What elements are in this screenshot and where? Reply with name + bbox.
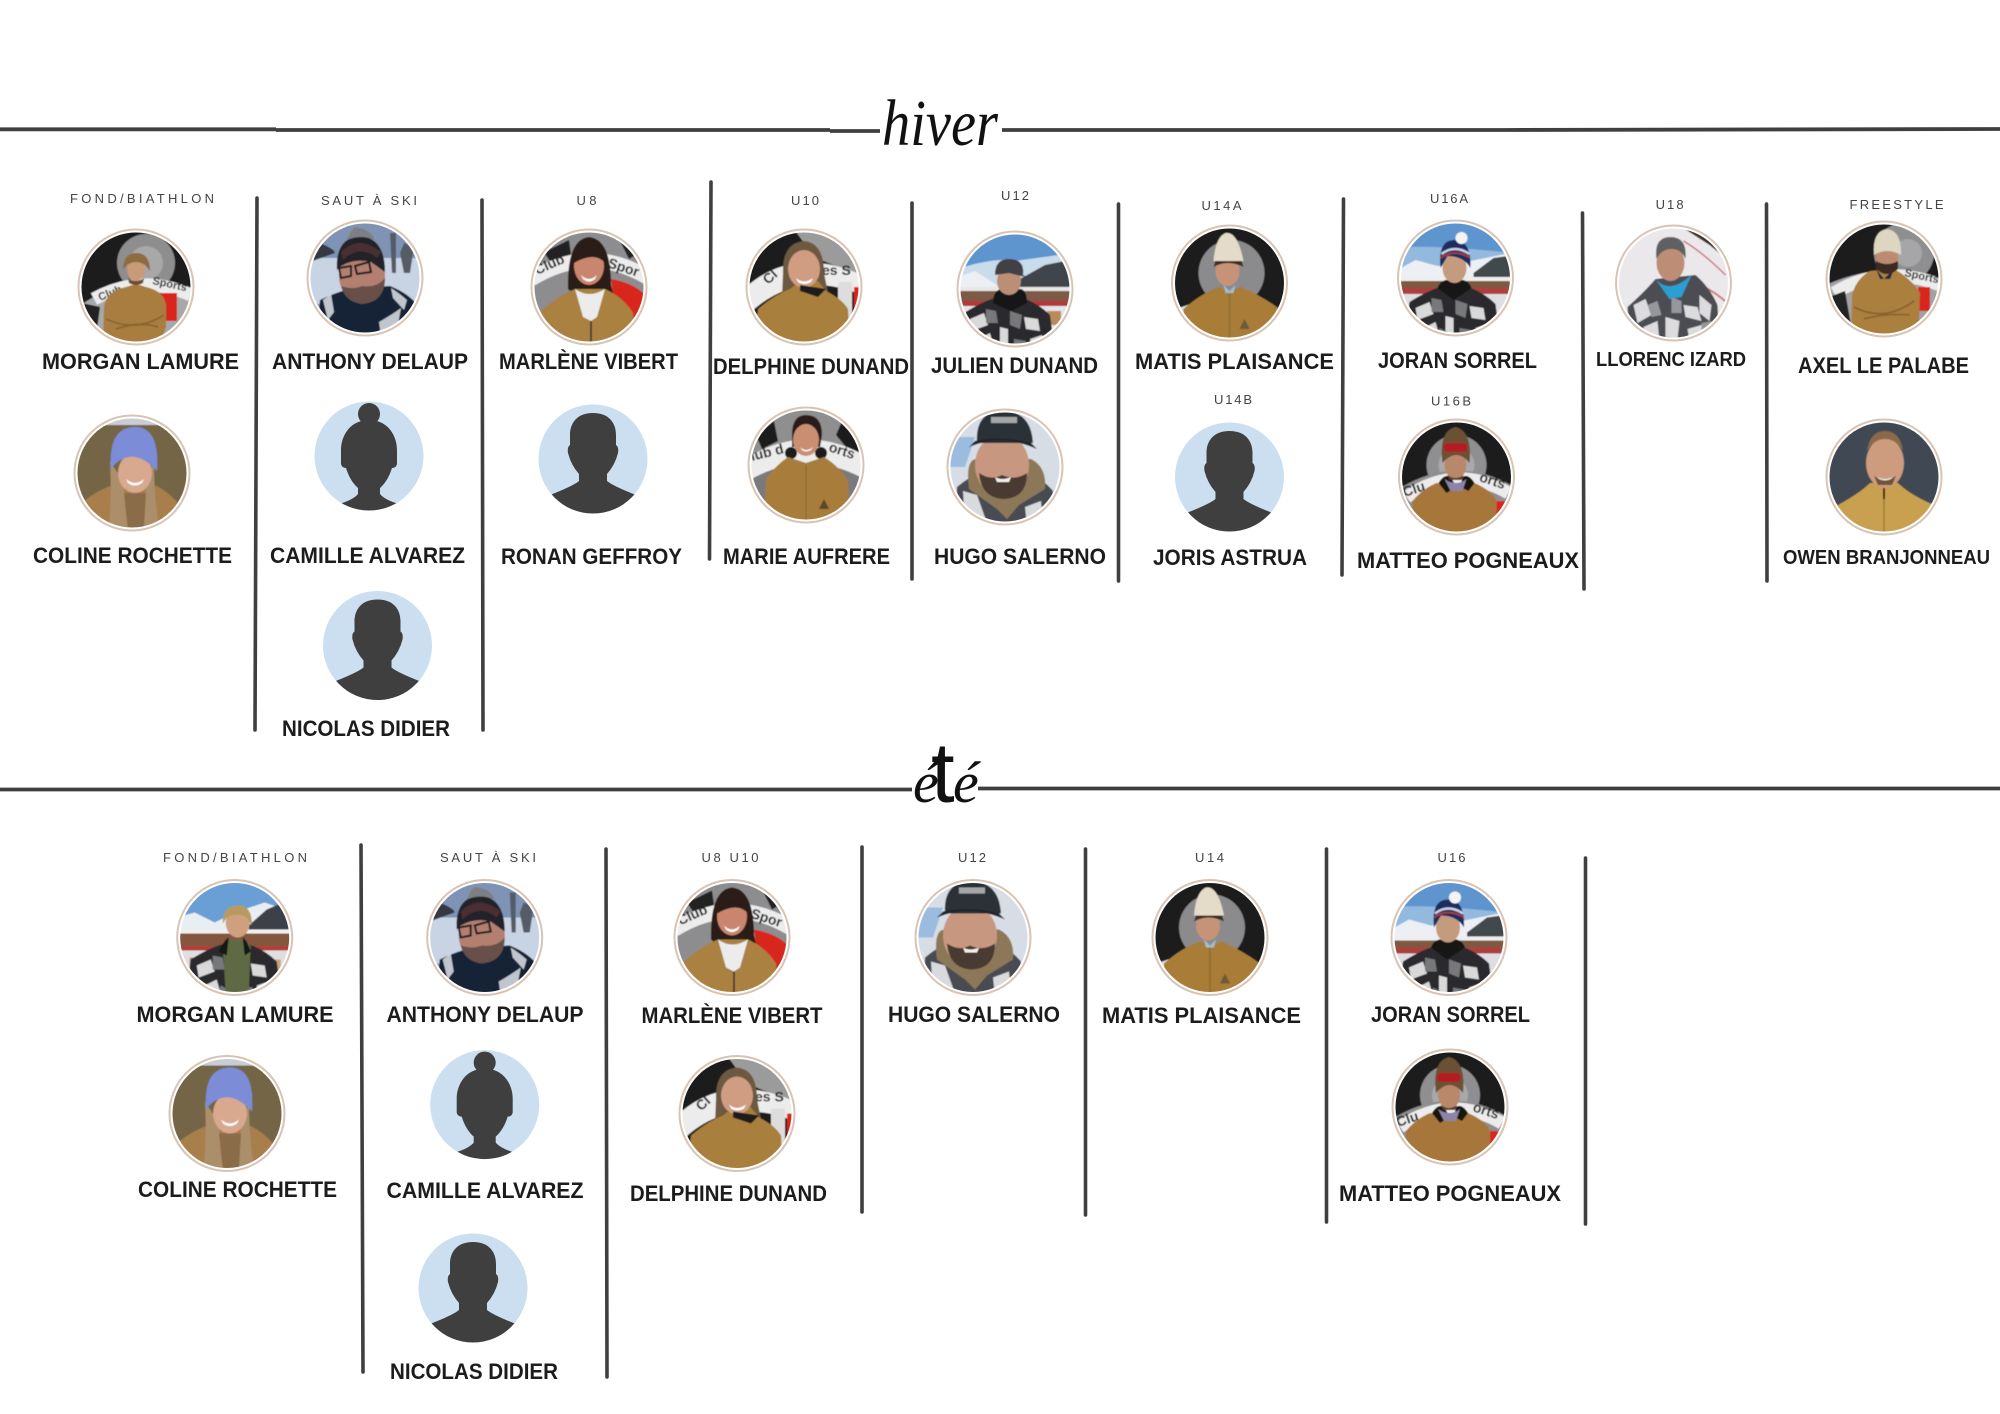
name: MORGAN LAMURE — [136, 1002, 334, 1027]
name: MATTEO POGNEAUX — [1339, 1181, 1561, 1206]
name: MARLÈNE VIBERT — [642, 1003, 823, 1028]
silhouette: Nicolas Didier — [318, 588, 438, 706]
name: MARIE AUFRERE — [723, 544, 890, 569]
silhouette: Camille Alvarez — [311, 398, 427, 516]
category label: FREESTYLE — [1850, 197, 1944, 212]
name: AXEL LE PALABE — [1798, 353, 1969, 378]
divider — [606, 849, 607, 1377]
panel: U18 — [1596, 197, 1746, 371]
name: COLINE ROCHETTE — [33, 543, 232, 568]
portrait: Axel Le Palabe — [1826, 221, 1942, 339]
category label: U16 — [1438, 850, 1466, 865]
category label: U14 — [1195, 850, 1224, 865]
portrait: Anthony Delaup — [307, 220, 423, 336]
name: HUGO SALERNO — [888, 1002, 1060, 1027]
panel: SAUT À SKI — [386, 850, 584, 1384]
name: NICOLAS DIDIER — [282, 716, 450, 741]
category label: U14B — [1214, 392, 1252, 407]
divider — [361, 845, 363, 1372]
portrait: Anthony Delaup — [427, 880, 543, 996]
category label: U12 — [1001, 188, 1029, 203]
portrait: Matteo Pogneaux — [1392, 1049, 1508, 1167]
portrait: Morgan Lamure — [177, 880, 293, 1006]
silhouette: Camille Alvarez — [427, 1047, 543, 1165]
silhouette: Ronan Geffroy — [533, 401, 653, 519]
category label: U16A — [1430, 191, 1468, 206]
panel: U12 — [931, 188, 1106, 569]
divider — [710, 182, 711, 559]
name: ANTHONY DELAUP — [272, 349, 468, 374]
panel: U12 — [888, 850, 1060, 1027]
divider — [1765, 204, 1769, 581]
title: été: t — [931, 726, 955, 821]
name: NICOLAS DIDIER — [390, 1359, 558, 1384]
category label: FOND/BIATHLON — [163, 850, 307, 865]
portrait: Joran Sorrel — [1391, 880, 1507, 1008]
name: MATIS PLAISANCE — [1135, 349, 1334, 374]
portrait: Marie Aufrere — [748, 407, 864, 525]
portrait: Julien Dunand — [957, 231, 1073, 359]
category label: U14A — [1202, 198, 1242, 213]
section: hiver — [0, 87, 2000, 741]
name: MORGAN LAMURE — [42, 349, 239, 374]
name: DELPHINE DUNAND — [713, 354, 909, 379]
divider — [1582, 213, 1584, 589]
portrait: Coline Rochette — [169, 1056, 285, 1174]
name: JORIS ASTRUA — [1153, 545, 1307, 570]
portrait: Coline Rochette — [74, 415, 190, 533]
portrait: Owen Branjonneau — [1826, 419, 1942, 537]
name: ANTHONY DELAUP — [386, 1002, 584, 1027]
name: HUGO SALERNO — [934, 544, 1106, 569]
name: MARLÈNE VIBERT — [499, 349, 679, 374]
name: MATIS PLAISANCE — [1102, 1003, 1301, 1028]
portrait: Matteo Pogneaux — [1398, 419, 1514, 537]
category label: FOND/BIATHLON — [70, 191, 214, 206]
section: été — [0, 726, 2000, 1384]
divider — [255, 198, 257, 730]
panel: FOND/BIATHLON — [33, 191, 239, 568]
name: LLORENC IZARD — [1596, 349, 1746, 371]
panel: SAUT À SKI — [270, 193, 468, 741]
portrait: Matis Plaisance — [1152, 880, 1268, 998]
portrait: Morgan Lamure — [78, 229, 194, 345]
name: CAMILLE ALVAREZ — [270, 543, 465, 568]
category label: U10 — [791, 193, 819, 208]
portrait: Hugo Salerno — [947, 409, 1063, 527]
category label: U12 — [958, 850, 986, 865]
title: été: é — [913, 750, 941, 815]
category label: U18 — [1656, 197, 1684, 212]
portrait: Delphine Dunand — [679, 1056, 795, 1174]
panel: FREESTYLE — [1783, 197, 1990, 569]
category label: U16B — [1431, 394, 1471, 408]
panel: U14 — [1135, 198, 1334, 570]
portrait: Hugo Salerno — [915, 880, 1031, 998]
title: hiver: hiver — [882, 87, 998, 160]
panel: U10 — [713, 193, 909, 569]
portrait: Matis Plaisance — [1172, 225, 1288, 343]
panel: U16 — [1339, 850, 1561, 1206]
divider — [482, 200, 483, 730]
silhouette: Joris Astrua — [1170, 419, 1290, 537]
name: OWEN BRANJONNEAU — [1783, 547, 1990, 569]
panel: FOND/BIATHLON — [136, 850, 337, 1202]
category label: SAUT À SKI — [440, 850, 536, 865]
portrait: Llorenc Izard — [1616, 225, 1732, 343]
divider — [860, 847, 864, 1212]
portrait: Delphine Dunand — [746, 229, 862, 347]
divider — [1084, 849, 1087, 1215]
name: JORAN SORREL — [1371, 1002, 1530, 1027]
panel: U14 — [1102, 850, 1301, 1028]
name: JORAN SORREL — [1378, 348, 1537, 373]
name: DELPHINE DUNAND — [630, 1181, 827, 1206]
divider — [1342, 199, 1344, 575]
silhouette: Nicolas Didier — [413, 1230, 533, 1348]
divider — [1584, 858, 1587, 1224]
category label: U8 — [576, 193, 596, 208]
name: JULIEN DUNAND — [931, 353, 1098, 378]
title: été: é — [953, 750, 981, 815]
portrait: Marlène Vibert — [674, 880, 790, 998]
divider — [910, 203, 914, 579]
name: COLINE ROCHETTE — [138, 1177, 337, 1202]
category label: SAUT À SKI — [321, 193, 417, 208]
name: RONAN GEFFROY — [501, 544, 682, 569]
heading rule: été — [0, 788, 2000, 790]
portrait: Marlène Vibert — [531, 229, 647, 347]
portrait: Joran Sorrel — [1398, 220, 1514, 348]
panel: U8 U10 — [630, 850, 827, 1206]
name: CAMILLE ALVAREZ — [386, 1178, 584, 1203]
divider — [1325, 849, 1328, 1222]
panel: U16 — [1357, 191, 1579, 573]
panel: U8 — [499, 193, 682, 569]
heading rule: hiver — [0, 129, 2000, 131]
category label: U8 U10 — [702, 850, 758, 865]
divider — [1117, 204, 1120, 581]
name: MATTEO POGNEAUX — [1357, 548, 1579, 573]
